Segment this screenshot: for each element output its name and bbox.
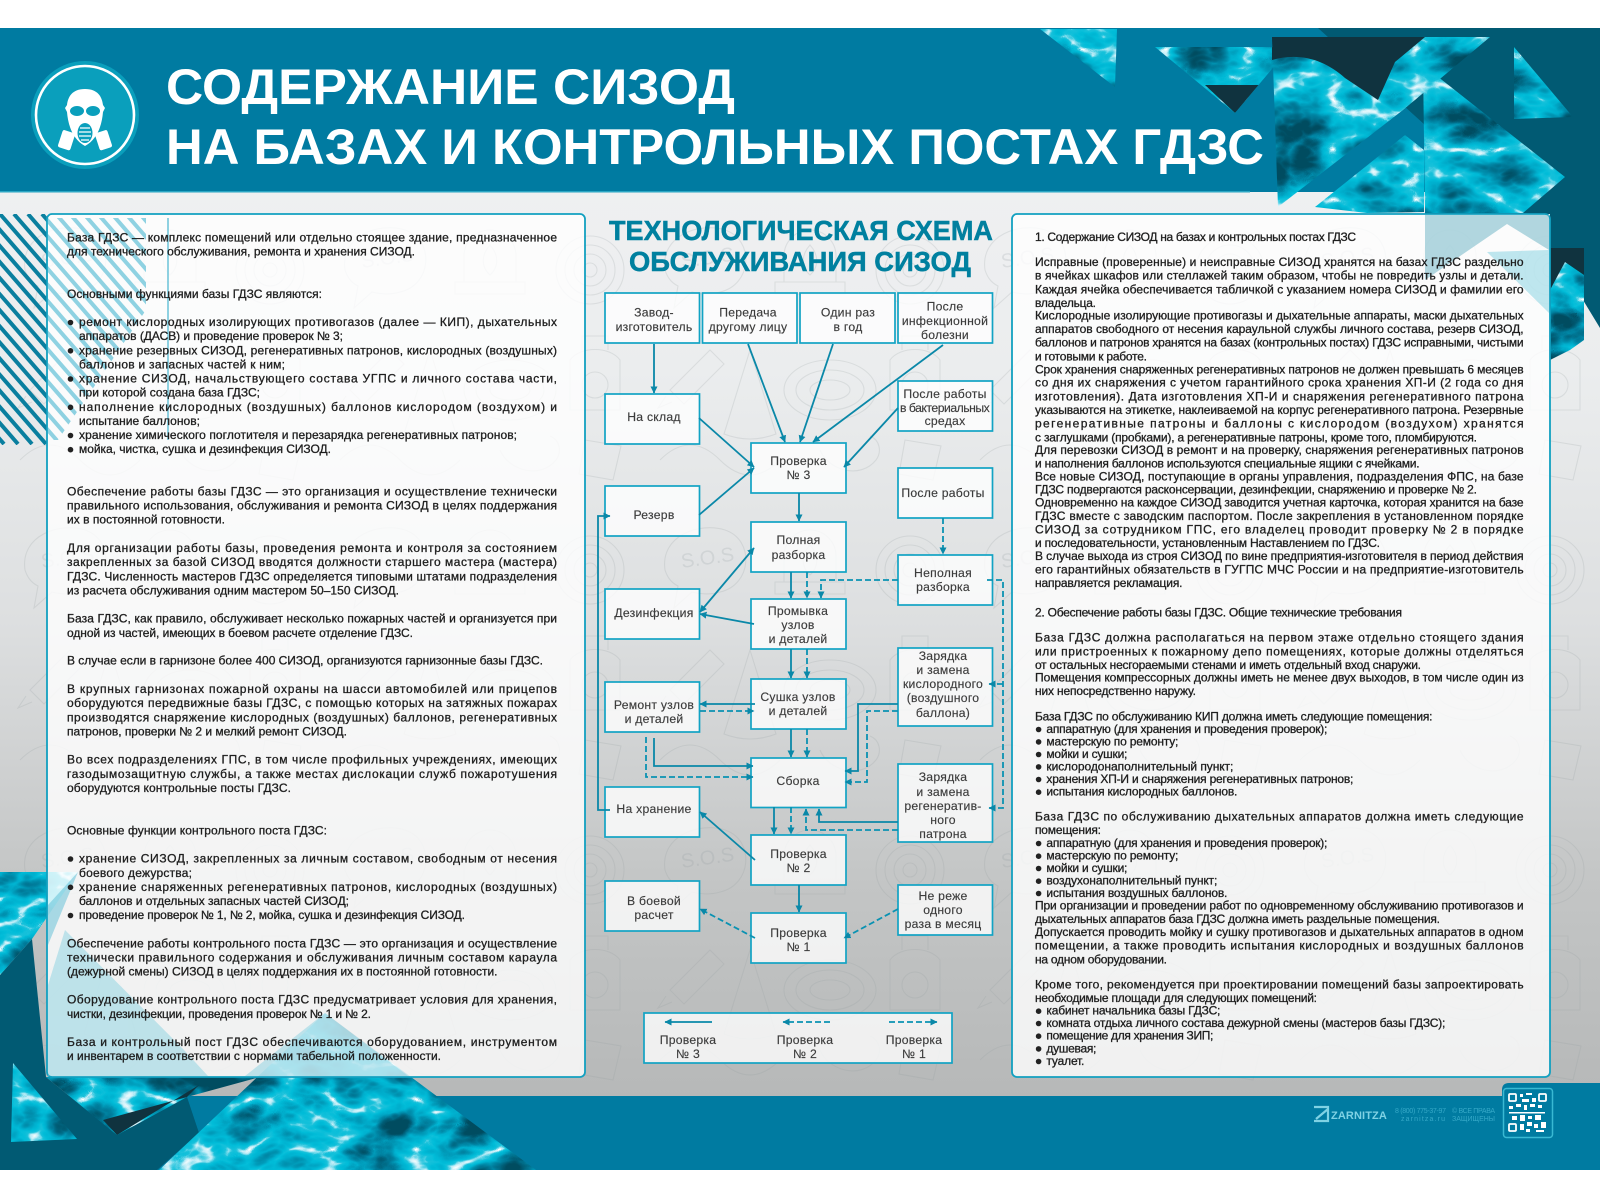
list: breathing apparatus rooms: помещения: — [1035, 823, 1101, 837]
arrow: бактериальные среды to Проверка 3 — [844, 408, 898, 467]
paragraph: supply: База и контрольный пост ГДЗС обеспечиваются оборудованием, инструментом — [67, 1035, 557, 1049]
list: KIP rooms: мойки и сушки; — [1046, 747, 1127, 761]
paragraph: record card — [1035, 495, 1524, 550]
arrow: Зарядка регенеративного to Сборка solid — [819, 809, 898, 822]
list: post functions: хранение СИЗОД, закрепленных за личным составом, свободным от несения — [79, 852, 557, 866]
paragraph: claims — [1035, 549, 1524, 590]
paragraph: shelf life: изготовления). Дата изготовления ХП-И и снаряжения регенеративного патрона — [1035, 389, 1524, 403]
paragraph: base operation: Обеспечение работы базы ГДЗС — это организация и осуществление технически — [67, 484, 557, 498]
arrow: Проверка 1 to В боевой расчет — [700, 909, 755, 938]
arrow: Сушка to Сборка dashed — [806, 729, 808, 757]
list: additional rooms: туалет. — [1046, 1054, 1084, 1068]
paragraph: transport — [1035, 443, 1524, 470]
paragraph: claims: его гарантийных обязательств в ГУГПС МЧС России и на предприятие-изготовитель — [1035, 563, 1524, 577]
list: base functions: мойка, чистка, сушка и дезинфекция СИЗОД. — [79, 442, 331, 456]
box: Полная разборка: разборка — [772, 548, 825, 562]
paragraph: mobile bases — [67, 682, 557, 738]
box: На склад: На склад — [627, 410, 681, 424]
box: Проверка № 2: Проверка — [770, 847, 827, 861]
arrow: После работы to Неполная — [942, 518, 944, 554]
arrow: Ремонт to Сушка dashed — [700, 710, 754, 712]
title: НА БАЗАХ И КОНТРОЛЬНЫХ ПОСТАХ ГДЗС — [166, 119, 1264, 175]
arrow: Полная to Промывка dashed — [806, 572, 808, 598]
box: Зарядка и замена кислородного баллона: (воздушного — [907, 691, 979, 705]
arrow: Один раз to Проверка 3 — [800, 344, 833, 442]
paragraph: clean and ready: Кислородные изолирующие противогазы и дыхательные аппараты, маски дыхательных — [1035, 309, 1524, 323]
box: Зарядка и замена регенеративного патрона: регенератив- — [904, 799, 982, 813]
box: После инфекционной болезни: После — [927, 300, 963, 314]
list: post functions: проведение проверок № 1, № 2, мойка, сушка и дезинфекция СИЗОД. — [79, 908, 465, 922]
list: base functions: испытание баллонов; — [79, 414, 200, 428]
decoration: bottom left smoke triangles — [0, 860, 560, 1170]
box: Проверка № 1: Проверка — [770, 926, 827, 940]
arrow: Не реже to Проверка 1 — [844, 909, 898, 938]
list: breathing apparatus rooms: мойки и сушки; — [1046, 861, 1127, 875]
paragraph: record card: СИЗОД за сотрудником ГПС, его владелец проводит проверку № 2 в порядке — [1035, 523, 1524, 537]
box: Резерв: Резерв — [633, 508, 675, 522]
box: Передача другому лицу: Передача — [719, 306, 777, 320]
paragraph: control posts: оборудуются контрольные посты ГДЗС. — [67, 781, 291, 795]
arrow: Зарядка кислородного to Сборка solid — [845, 704, 898, 771]
box: Проверка № 2 — [751, 835, 846, 885]
footer logo: ZARNITZA — [1331, 1110, 1388, 1122]
list: KIP rooms: кислородонаполнительный пункт; — [1046, 759, 1233, 773]
box: Проверка № 2: № 2 — [786, 861, 810, 875]
paragraph: post equipment — [67, 993, 557, 1021]
paragraph: functions heading: Основными функциями базы ГДЗС являются: — [67, 287, 322, 301]
paragraph: supply — [67, 1035, 557, 1063]
paragraph: mobile bases: оборудуются передвижные базы ГДЗС, с помощью которых на затяжных пожарах — [67, 696, 557, 710]
box: Зарядка и замена кислородного баллона: и замена — [916, 663, 970, 677]
paragraph: separate rooms: дыхательных аппаратов база ГДЗС должна иметь раздельные помещения. — [1035, 912, 1440, 926]
arrow: Передача to Проверка 3 — [748, 344, 785, 442]
panel: right card background — [1012, 214, 1550, 1077]
box: Резерв — [605, 486, 700, 536]
paragraph: storage: Исправные (проверенные) и неисправные СИЗОД хранятся на базах ГДЗС раздельно — [1035, 255, 1524, 269]
paragraph: clean and ready: и готовыми к работе. — [1035, 349, 1147, 363]
list: additional rooms: душевая; — [1046, 1041, 1096, 1055]
legend — [644, 1013, 952, 1063]
footer contacts: zarnitza.ru — [1401, 1116, 1445, 1123]
box: Зарядка и замена кислородного баллона — [898, 648, 992, 726]
paragraph: new items: Все новые СИЗОД, поступающие в органы управления, подразделения ФПС, на базе — [1035, 469, 1524, 483]
arrow: Ремонт to Сборка solid — [654, 738, 753, 766]
box: После инфекционной болезни: болезни — [921, 328, 969, 342]
paragraph: new items — [1035, 469, 1524, 497]
list: additional rooms: комната отдыха личного состава дежурной смены (мастеров базы ГДЗС); — [1046, 1016, 1445, 1030]
list: KIP rooms: аппаратную (для хранения и проведения проверок); — [1046, 722, 1327, 736]
title icon: gas mask — [31, 61, 139, 169]
box: Не реже одного раза в месяц — [898, 885, 992, 935]
paragraph: location: База ГДЗС должна располагаться на первом этаже отдельно стоящего здания — [1035, 631, 1524, 645]
box: Зарядка и замена регенеративного патрона: патрона — [919, 827, 967, 841]
list: breathing apparatus rooms: воздухонаполнительный пункт; — [1046, 874, 1217, 888]
list: KIP rooms: мастерскую по ремонту; — [1046, 734, 1178, 748]
box: Зарядка и замена регенеративного патрона — [898, 764, 992, 842]
text block: right panel — [1035, 230, 1524, 1068]
arrow: Сушка to Сборка solid — [790, 729, 792, 757]
paragraph: location: от остальных несгораемыми стенами и иметь отдельный вход снаружи. — [1035, 658, 1421, 672]
box: Зарядка и замена кислородного баллона: баллона) — [916, 706, 970, 720]
legend label: Проверка 3 — [660, 1033, 716, 1061]
title: СОДЕРЖАНИЕ СИЗОД — [166, 59, 735, 115]
arrow: Дезинфекция and Полная разборка — [700, 548, 754, 612]
box: Один раз в год — [800, 293, 895, 343]
paragraph: shelf life: со дня их снаряжения с учетом гарантийного срока хранения ХП-И (2 года со дня — [1035, 376, 1524, 390]
paragraph: location: или пристроенных к пожарному депо помещениях, которые должны отделяться — [1035, 644, 1524, 658]
paragraph: separate rooms: на одном оборудовании. — [1035, 952, 1167, 966]
paragraph: shelf life: с заглушками (пробками), а регенеративные патроны, кроме того, пломбируются. — [1035, 430, 1477, 444]
paragraph: base operation — [67, 484, 557, 527]
box: Зарядка и замена регенеративного патрона: Зарядка — [919, 770, 967, 784]
paragraph: post operation: технически правильного содержания и обслуживания личным составом караула — [67, 950, 557, 964]
box: Проверка № 3 — [751, 443, 846, 493]
paragraph: masters: ГДЗС. Численность мастеров ГДЗС определяется типовыми штатами подразделения — [67, 569, 557, 583]
chart heading: ОБСЛУЖИВАНИЯ СИЗОД — [629, 246, 971, 277]
list: additional rooms: кабинет начальника базы ГДЗС; — [1046, 1004, 1220, 1018]
paragraph: masters: из расчета обслуживания одним мастером 50–150 СИЗОД. — [67, 583, 399, 597]
paragraph: clean and ready: баллонов и патронов хранятся на базах (контрольных постах) ГДЗС исправными, чистыми — [1035, 336, 1524, 350]
box: После работы: После работы — [901, 486, 985, 500]
arrow: Сборка to Проверка 2 solid — [773, 807, 775, 834]
list: KIP rooms: База ГДЗС по обслуживанию КИП должна иметь следующие помещения: — [1035, 709, 1432, 723]
paragraph: record card: Одновременно на каждое СИЗОД заводится учетная карточка, которая хранится на базе — [1035, 495, 1524, 509]
paragraph: separate rooms: Допускается проводить мойку и сушку противогазов и дыхательных аппаратов в одном — [1035, 925, 1524, 939]
list: base functions: ремонт кислородных изолирующих противогазов (далее — КИП), дыхательных — [79, 315, 557, 329]
list: additional rooms — [1035, 978, 1524, 1068]
list: post functions — [68, 852, 557, 922]
list: KIP rooms — [1035, 709, 1432, 799]
paragraph: service scope: База ГДЗС, как правило, обслуживает несколько пожарных частей и организуется при — [67, 612, 557, 626]
paragraph: shelf life: Срок хранения снаряженных регенеративных патронов не должен превышать 6 месяцев — [1035, 362, 1524, 376]
paragraph: shelf life: указываются на этикетке, наклеиваемой на корпус регенеративного патрона. Резервные — [1035, 403, 1524, 417]
list: post functions: боевого дежурства; — [79, 866, 192, 880]
paragraph: shelf life — [1035, 362, 1524, 444]
box: Полная разборка: Полная — [776, 533, 820, 547]
paragraph: base operation: правильного использования, обслуживания и ремонта СИЗОД в целях поддержания — [67, 498, 557, 512]
legend label: Проверка 3: Проверка — [660, 1033, 716, 1047]
list: breathing apparatus rooms — [1035, 810, 1524, 900]
list: base functions: баллонов и запасных частей к ним; — [79, 357, 285, 371]
arrow: Промывка to Сушка solid — [790, 649, 792, 678]
list: base functions — [68, 315, 557, 456]
box: После работы в бактериальных средах: После работы — [903, 387, 987, 401]
paragraph: transport: и наполнения баллонов используются специальные ящики с ячейками. — [1035, 456, 1420, 470]
footer contacts: 8 (800) 775-37-97 — [1395, 1108, 1446, 1115]
box: Проверка № 1 — [751, 913, 846, 963]
box: Сушка узлов и деталей: Сушка узлов — [760, 690, 836, 704]
box: Промывка узлов и деталей — [751, 599, 846, 649]
paragraph: record card: ГДЗС вместе с заводским паспортом. После закрепления в установленном порядке — [1035, 509, 1524, 523]
legend arrow: Проверка 3 — [665, 1021, 712, 1023]
paragraph: location: них непосредственно наружу. — [1035, 684, 1196, 698]
decoration: pale triangles inside left card — [48, 872, 408, 1076]
paragraph: storage: владельца. — [1035, 296, 1096, 310]
list: breathing apparatus rooms: мастерскую по ремонту; — [1046, 849, 1178, 863]
box: Промывка узлов и деталей: Промывка — [768, 604, 828, 618]
box: После работы — [898, 468, 992, 518]
paragraph: new items: ГДЗС подвергаются расконсервации, дезинфекции, снаряжению и проверке № 2. — [1035, 483, 1477, 497]
box: Проверка № 1: № 1 — [786, 940, 810, 954]
box: Зарядка и замена кислородного баллона: Зарядка — [919, 649, 967, 663]
box: Один раз в год: Один раз — [821, 306, 875, 320]
paragraph: post operation: Обеспечение работы контрольного поста ГДЗС — это организация и осуществление — [67, 936, 557, 950]
box: После инфекционной болезни: инфекционной — [902, 314, 988, 328]
list: additional rooms: помещение для хранения ЗИП; — [1046, 1029, 1213, 1043]
decoration: left diagonal hatch — [0, 214, 47, 445]
arrow: Полная to Промывка solid — [790, 572, 792, 598]
panel: left card background — [47, 214, 585, 1077]
arrow: Промывка to Дезинфекция — [700, 614, 754, 624]
list: base functions: хранение резервных СИЗОД, регенеративных патронов, кислородных (воздушных) — [79, 343, 557, 357]
paragraph: separate rooms: помещении, а также проводить испытания кислородных и воздушных баллонов — [1035, 939, 1524, 953]
list: post functions: баллонов и отдельных запасных частей СИЗОД; — [79, 894, 349, 908]
paragraph: definition: База ГДЗС — комплекс помещений или отдельно стоящее здание, предназначенное — [67, 230, 557, 244]
box: Сборка — [751, 758, 846, 808]
footer contacts: © ВСЕ ПРАВА — [1452, 1107, 1495, 1115]
paragraph: clean and ready: аппаратов свободного от несения караульной службы личного состава, резерв СИЗОД, — [1035, 322, 1524, 336]
box: Неполная разборка: разборка — [916, 580, 970, 594]
paragraph: post equipment: чистки, дезинфекции, проведения проверок № 1 и № 2. — [67, 1007, 371, 1021]
legend label: Проверка 1 — [886, 1033, 942, 1061]
list: base functions: аппаратов (ДАСВ) и проведение проверок № 3; — [79, 329, 343, 343]
box: Завод-изготовитель: Завод- — [634, 306, 674, 320]
box: Промывка узлов и деталей: и деталей — [769, 632, 827, 646]
paragraph: clean and ready — [1035, 309, 1524, 363]
list: breathing apparatus rooms: аппаратную (для хранения и проведения проверок); — [1046, 836, 1327, 850]
paragraph: garrison bases: В случае если в гарнизоне более 400 СИЗОД, организуются гарнизонные базы ГДЗС. — [67, 654, 543, 668]
section heading 2: 2. Обеспечение работы базы ГДЗС. Общие технические требования — [1035, 605, 1402, 619]
paragraph: service scope: одной из частей, имеющих в боевом расчете отделение ГДЗС. — [67, 626, 413, 640]
box: Неполная разборка — [898, 555, 992, 605]
box: Дезинфекция: Дезинфекция — [614, 606, 694, 620]
box: Дезинфекция — [605, 589, 700, 639]
list: KIP rooms: испытания кислородных баллонов. — [1046, 785, 1237, 799]
decoration: top right dark field — [1318, 28, 1600, 328]
arrow: Промывка to Сушка dashed — [806, 649, 808, 678]
list: post functions: хранение снаряженных регенеративных патронов, кислородных (воздушных) — [79, 880, 557, 894]
arrow: На склад to Проверка 3 — [699, 418, 754, 467]
arrow: Завод to На склад — [653, 344, 655, 393]
box: Зарядка и замена кислородного баллона: кислородного — [903, 677, 983, 691]
box: После работы в бактериальных средах — [898, 381, 992, 431]
box: Передача другому лицу — [702, 293, 797, 343]
list: additional rooms: необходимые площади для следующих помещений: — [1035, 991, 1317, 1005]
paragraph: transport: Для перевозки СИЗОД в ремонт и на проверку, снаряжения регенеративных патронов — [1035, 443, 1524, 457]
list: breathing apparatus rooms: испытания воздушных баллонов. — [1046, 886, 1227, 900]
box: Неполная разборка: Неполная — [914, 566, 972, 580]
arrow: После болезни to Проверка 3 — [813, 345, 943, 442]
box: В боевой расчет: расчет — [634, 908, 674, 922]
legend label: Проверка 1: Проверка — [886, 1033, 942, 1047]
list: base functions: хранение химического поглотителя и перезарядка регенеративных патронов; — [79, 428, 517, 442]
section heading 1: 1. Содержание СИЗОД на базах и контрольных постах ГДЗС — [1035, 230, 1356, 244]
paragraph: record card: и последовательности, установленным Наставлением по ГДЗС. — [1035, 536, 1380, 550]
arrow: Зарядка регенеративного to Сборка dashed — [806, 809, 898, 830]
legend label: Проверка 3: № 3 — [676, 1047, 700, 1061]
list: breathing apparatus rooms: База ГДЗС по обслуживанию дыхательных аппаратов должна иметь следующие — [1035, 810, 1524, 824]
paragraph: service scope — [67, 612, 557, 640]
box: В боевой расчет: В боевой — [627, 894, 681, 908]
arrow: Проверка 3 to Полная разборка — [798, 493, 800, 521]
list: base functions: наполнение кислородных (воздушных) баллонов кислородом (воздухом) и — [79, 400, 557, 414]
paragraph: post equipment: Оборудование контрольного поста ГДЗС предусматривает условия для хранения, — [67, 993, 557, 1007]
legend label: Проверка 2: № 2 — [793, 1047, 817, 1061]
QR code — [1504, 1088, 1552, 1138]
box: Завод-изготовитель: изготовитель — [616, 320, 692, 334]
list: base functions: при которой создана база ГДЗС; — [79, 386, 260, 400]
title — [166, 59, 1264, 175]
box: Промывка узлов и деталей: узлов — [781, 618, 815, 632]
box: Ремонт узлов и деталей: и деталей — [625, 712, 683, 726]
box: Один раз в год: в год — [834, 320, 862, 334]
decoration: pale hatch inside left card — [48, 218, 169, 440]
legend arrow: Проверка 1 — [889, 1021, 937, 1023]
flowchart — [598, 293, 1003, 1063]
box: На хранение — [605, 787, 700, 837]
arrow: Неполная to Промывка — [821, 580, 898, 598]
paragraph: control posts — [67, 753, 557, 795]
box: Проверка № 3: № 3 — [786, 468, 810, 482]
paragraph: post functions heading: Основные функции контрольного поста ГДЗС: — [67, 823, 327, 837]
box: Не реже одного раза в месяц: одного — [923, 903, 963, 917]
arrow: Сборка to Проверка 2 dashed — [790, 807, 792, 834]
box: Ремонт узлов и деталей: Ремонт узлов — [614, 698, 694, 712]
paragraph: masters — [67, 541, 557, 597]
box: Не реже одного раза в месяц: Не реже — [918, 889, 968, 903]
paragraph: base operation: их в постоянной готовности. — [67, 513, 225, 527]
paragraph: storage — [1035, 255, 1524, 310]
box: Зарядка и замена регенеративного патрона: и замена — [916, 785, 970, 799]
paragraph: mobile bases: патронов, проверки № 2 и мелкий ремонт СИЗОД. — [67, 724, 347, 738]
paragraph: control posts: Во всех подразделениях ГПС, в том числе профильных учреждениях, имеющих — [67, 753, 557, 767]
box: После работы в бактериальных средах: в бактериальных — [900, 401, 990, 415]
box: Проверка № 3: Проверка — [770, 454, 827, 468]
arrow: Зарядка кислородного to Сборка dashed — [845, 711, 898, 782]
decoration: top right smoke triangles — [1030, 28, 1600, 368]
decoration: pale triangles inside right card — [1425, 215, 1549, 313]
paragraph: control posts: газодымозащитную службы, а также местах дислокации служб пожаротушения — [67, 767, 557, 781]
arrow: Сушка to Ремонт — [700, 703, 755, 705]
chart heading — [609, 215, 993, 277]
box: Зарядка и замена регенеративного патрона: ного — [930, 813, 956, 827]
box: Сушка узлов и деталей: и деталей — [769, 704, 827, 718]
box: Завод-изготовитель — [605, 293, 700, 343]
box: В боевой расчет — [605, 881, 700, 931]
box: Передача другому лицу: другому лицу — [709, 320, 788, 334]
box: После работы в бактериальных средах: средах — [925, 414, 965, 428]
list: additional rooms: Кроме того, рекомендуется при проектировании помещений базы запроектировать — [1035, 978, 1524, 992]
footer logo — [1314, 1107, 1388, 1122]
legend label: Проверка 2 — [777, 1033, 833, 1061]
footer contacts — [1395, 1107, 1495, 1123]
arrow: Проверка 2 to На хранение — [700, 812, 755, 860]
list: KIP rooms: хранения ХП-И и снаряжения регенеративных патронов; — [1046, 772, 1353, 786]
paragraph: mobile bases: производятся снаряжение кислородных (воздушных) баллонов, регенеративных — [67, 710, 557, 724]
box: На склад — [605, 394, 700, 444]
text block: left panel — [67, 230, 557, 1063]
paragraph: mobile bases: В крупных гарнизонах пожарной охраны на шасси автомобилей или прицепов — [67, 682, 557, 696]
arrow: Резерв to Проверка 3 — [699, 468, 754, 515]
paragraph: storage: в ячейках шкафов или стеллажей таким образом, чтобы не повредить узлы и детали. — [1035, 269, 1524, 283]
paragraph: definition — [67, 230, 557, 258]
paragraph: separate rooms: При организации и проведении работ по одновременному обслуживанию противогазов и — [1035, 899, 1524, 913]
arrow: Неполная to Зарядка кислородного — [989, 683, 1003, 685]
list: base functions: хранение СИЗОД, начальствующего состава УГПС и личного состава части, — [79, 372, 557, 386]
paragraph: storage: Каждая ячейка обеспечивается табличкой с указанием номера СИЗОД и фамилии его — [1035, 282, 1524, 296]
box: Полная разборка — [751, 522, 846, 572]
footer contacts: ЗАЩИЩЕНЫ — [1452, 1116, 1495, 1123]
paragraph: shelf life: регенеративные патроны и баллоны с кислородом (воздухом) хранятся — [1035, 417, 1524, 431]
chart heading: ТЕХНОЛОГИЧЕСКАЯ СХЕМА — [609, 215, 993, 246]
arrow: Проверка 2 to Проверка 1 — [798, 885, 800, 912]
footer band — [0, 1083, 1600, 1170]
paragraph: definition: для технического обслуживания, ремонта и хранения СИЗОД. — [67, 244, 415, 258]
box: Сборка: Сборка — [776, 774, 820, 788]
paragraph: separate rooms — [1035, 899, 1524, 966]
paragraph: location — [1035, 631, 1524, 698]
decoration: bottom left dark accent — [103, 1085, 199, 1135]
box: Не реже одного раза в месяц: раза в месяц — [905, 917, 981, 931]
paragraph: location: Помещения компрессорных должны иметь не менее двух выходов, в том числе один из — [1035, 671, 1524, 685]
legend arrow: Проверка 2 — [783, 1021, 830, 1023]
arrow: Неполная to Зарядка регенеративного — [987, 580, 1003, 808]
paragraph: masters: Для организации работы базы, проведения ремонта и контроля за состоянием — [67, 541, 557, 555]
box: Сушка узлов и деталей — [751, 679, 846, 729]
box: На хранение: На хранение — [616, 802, 692, 816]
decoration: bottom left dark shapes — [0, 939, 199, 1170]
arrow: Ремонт to Сборка dashed — [646, 737, 753, 777]
paragraph: post operation — [67, 936, 557, 979]
paragraph: masters: закрепленных за базой СИЗОД вводятся должности старшего мастера (мастера) — [67, 555, 557, 569]
legend label: Проверка 1: № 1 — [902, 1047, 926, 1061]
header band — [0, 28, 1600, 192]
legend label: Проверка 2: Проверка — [777, 1033, 833, 1047]
box: После инфекционной болезни — [898, 293, 992, 343]
box: Ремонт узлов и деталей — [605, 682, 700, 732]
arrow: На хранение to Резерв — [598, 516, 610, 810]
paragraph: claims: В случае выхода из строя СИЗОД по вине предприятия-изготовителя в период действия — [1035, 549, 1524, 563]
paragraph: post operation: (дежурной смены) СИЗОД в целях поддержания их в постоянной готовности. — [67, 965, 498, 979]
paragraph: supply: и инвентарем в соответствии с нормами табельной положенности. — [67, 1049, 441, 1063]
paragraph: claims: направляется рекламация. — [1035, 576, 1182, 590]
